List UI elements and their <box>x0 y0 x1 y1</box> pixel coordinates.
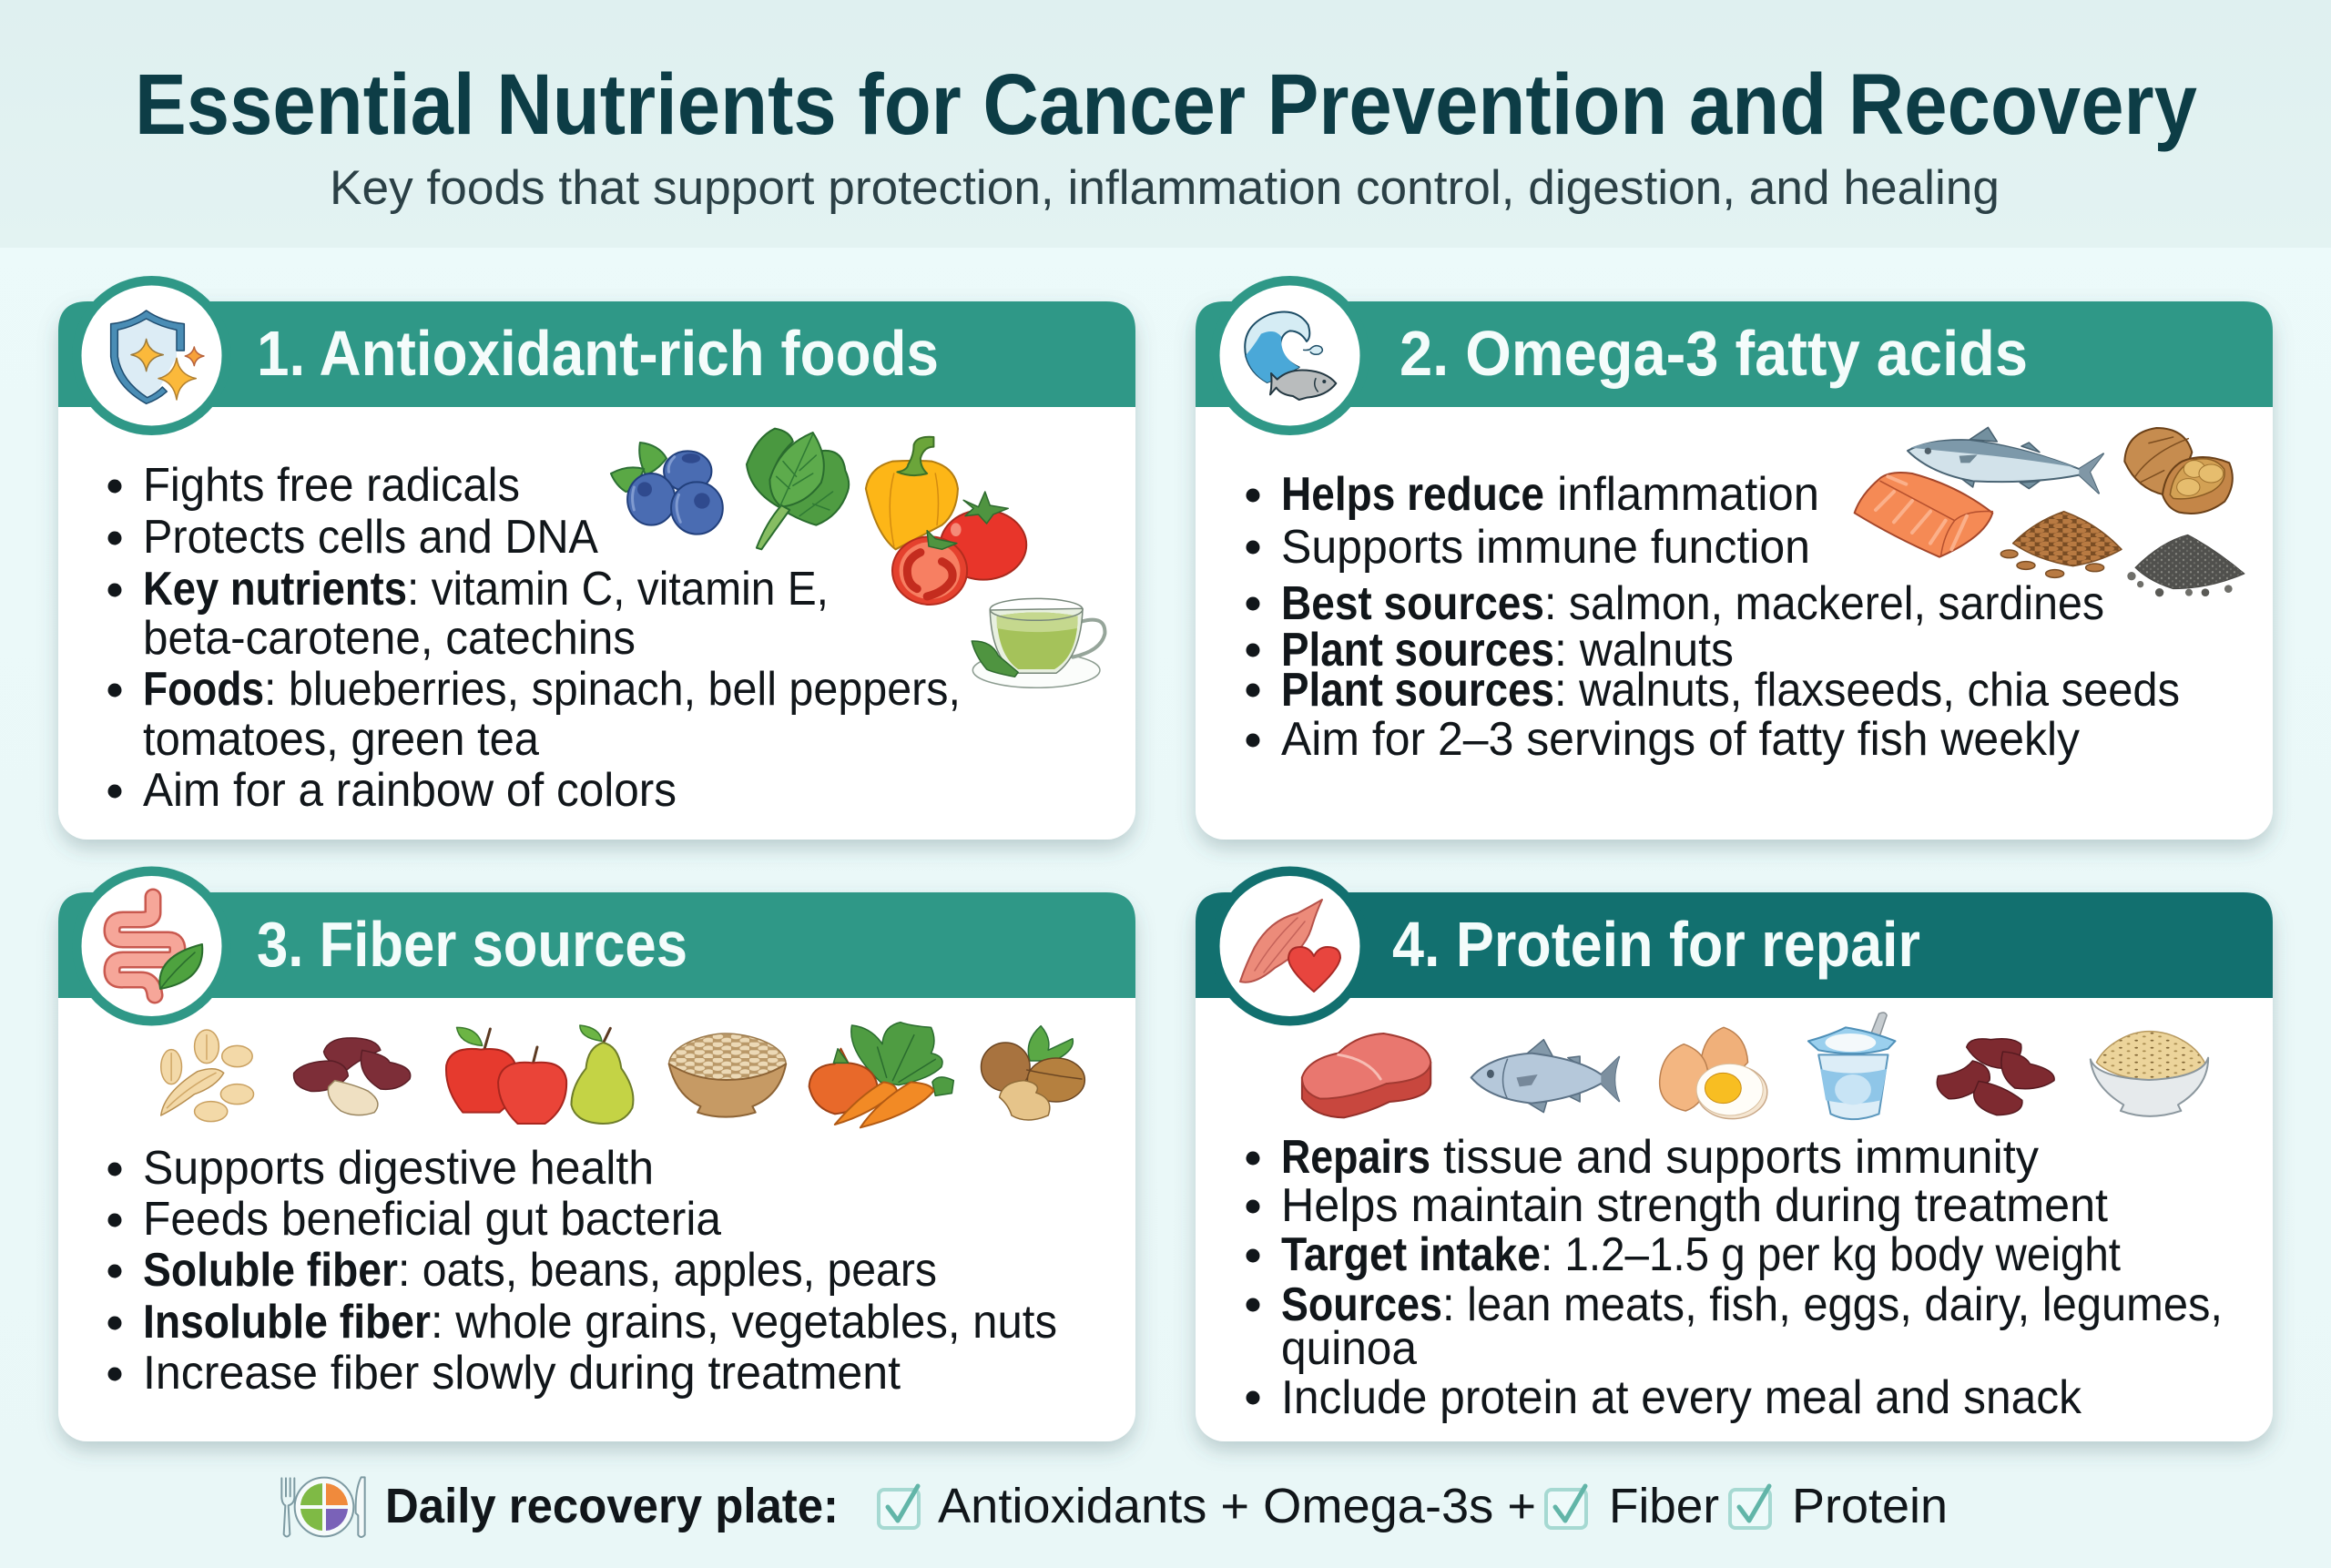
bullet list: Fights free radicals <box>143 459 520 512</box>
bullet list: Helps reduce <box>1281 468 1544 521</box>
heading: 4. Protein for repair <box>1392 909 1920 980</box>
icon: checkbox <box>879 1486 919 1528</box>
bullet list <box>107 1142 1057 1400</box>
icon: steak <box>1302 1033 1430 1117</box>
bullet list: Helps maintain strength during treatment <box>1281 1179 2109 1232</box>
icon: vegetables <box>809 1023 953 1127</box>
footer: daily recovery plate <box>281 1477 1948 1537</box>
icon: tomatoes <box>892 492 1026 605</box>
bullet list: quinoa <box>1281 1322 1417 1375</box>
icon: plate with fork and knife <box>281 1477 365 1537</box>
bullet list: tissue and supports immunity <box>1430 1131 2039 1184</box>
bullet list: Increase fiber slowly during treatment <box>143 1347 901 1400</box>
icon: fish <box>1471 1040 1619 1113</box>
bullet list: : blueberries, spinach, bell peppers, <box>264 663 961 716</box>
bullet list: : vitamin C, vitamin E, <box>407 563 829 616</box>
bullet list: Sources <box>1281 1278 1442 1331</box>
icon: checkbox <box>1730 1486 1770 1528</box>
icon: eggs <box>1660 1027 1767 1119</box>
heading: 3. Fiber sources <box>257 909 687 980</box>
icon: chia seeds <box>2127 535 2244 596</box>
text: antioxidants and omega-3s: Antioxidants + Omega-3s + <box>938 1479 1536 1533</box>
icon: pear <box>571 1025 633 1124</box>
panel: protein for repair <box>1196 867 2273 1441</box>
bullet list: Include protein at every meal and snack <box>1281 1371 2082 1424</box>
bullet list: inflammation <box>1544 468 1819 521</box>
heading: 2. Omega-3 fatty acids <box>1400 318 2028 389</box>
bullet list: Foods <box>143 663 264 716</box>
bullet list: tomatoes, green tea <box>143 713 539 766</box>
bullet list: Repairs <box>1281 1131 1430 1184</box>
icon: checkbox <box>1546 1486 1586 1528</box>
bullet list: Aim for a rainbow of colors <box>143 764 677 817</box>
icon: kidney beans <box>1937 1039 2054 1115</box>
icon: blueberries <box>611 443 723 535</box>
bullet list <box>107 459 961 817</box>
icon: green tea cup <box>972 598 1104 687</box>
icon: beans <box>294 1038 411 1115</box>
bullet list: : salmon, mackerel, sardines <box>1544 577 2104 630</box>
icon: intestine with leaf <box>112 897 202 995</box>
bullet list: Key nutrients <box>143 563 407 616</box>
icon: walnuts <box>2124 428 2233 514</box>
label: Daily recovery plate: <box>385 1479 839 1533</box>
icon: flaxseeds <box>2000 512 2122 577</box>
icon: grain bowl <box>669 1033 786 1117</box>
bullet list: Supports immune function <box>1281 521 1810 574</box>
panel: antioxidant-rich foods <box>58 276 1135 840</box>
icon: mackerel <box>1908 427 2103 494</box>
bullet list: Plant sources <box>1281 664 1554 717</box>
icon: quinoa bowl <box>2091 1032 2208 1116</box>
text: protein: Protein <box>1792 1479 1948 1533</box>
text: fiber: Fiber <box>1609 1479 1719 1533</box>
bullet list: : lean meats, fish, eggs, dairy, legumes, <box>1442 1278 2223 1331</box>
bullet list: Feeds beneficial gut bacteria <box>143 1193 721 1246</box>
icon: salmon fillet <box>1855 473 1992 557</box>
bullet list: Aim for 2–3 servings of fatty fish weekly <box>1281 713 2080 766</box>
bullet list: : walnuts <box>1554 624 1734 677</box>
bullet list <box>1246 468 2180 766</box>
bullet list: Insoluble fiber <box>143 1296 431 1349</box>
icon: yellow bell pepper <box>866 437 958 549</box>
icon: spinach <box>747 429 849 549</box>
panel: fiber sources <box>58 867 1135 1441</box>
bullet list: Soluble fiber <box>143 1244 398 1297</box>
icon: yogurt <box>1808 1013 1895 1119</box>
bullet list: Best sources <box>1281 577 1544 630</box>
bullet list: Protects cells and DNA <box>143 511 598 564</box>
bullet list: beta-carotene, catechins <box>143 612 636 665</box>
subtitle: Key foods that support protection, inflammation control, digestion, and healing <box>330 161 2000 215</box>
bullet list: Plant sources <box>1281 624 1554 677</box>
header band <box>0 0 2331 248</box>
bullet list: : 1.2–1.5 g per kg body weight <box>1541 1228 2121 1281</box>
bullet list: : oats, beans, apples, pears <box>398 1244 937 1297</box>
panel: omega-3 fatty acids <box>1196 276 2273 840</box>
icon: wave and fish <box>1245 312 1336 400</box>
heading: 1. Antioxidant-rich foods <box>257 318 939 389</box>
bullet list: : walnuts, flaxseeds, chia seeds <box>1554 664 2180 717</box>
icon: oats <box>161 1030 254 1122</box>
bullet list <box>1246 1131 2223 1424</box>
icon: nuts <box>981 1026 1084 1120</box>
bullet list: Supports digestive health <box>143 1142 654 1195</box>
icon: shield with sparkles <box>111 311 204 403</box>
bullet list: : whole grains, vegetables, nuts <box>431 1296 1057 1349</box>
icon: apples <box>446 1027 566 1124</box>
icon: muscle and heart <box>1240 900 1340 992</box>
bullet list: Target intake <box>1281 1228 1541 1281</box>
